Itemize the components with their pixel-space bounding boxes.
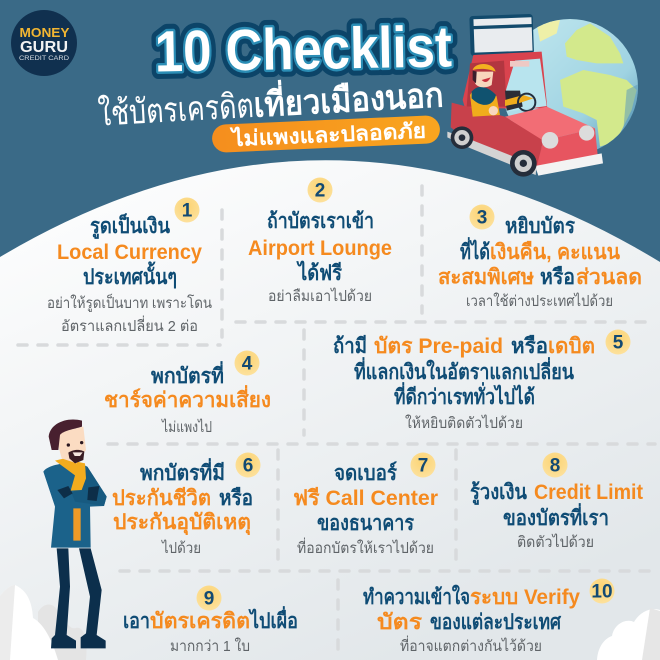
item 8: 8 [550,456,560,476]
item 7: ของธนาคาร [317,512,415,535]
subtitle: เที่ยวเมืองนอก [252,70,445,125]
item 6 [112,452,260,557]
item 1 [47,198,212,335]
item 1: รูดเป็นเงิน [90,212,171,240]
title: 10 Checklist: 10 Checklist [154,14,452,85]
logo: Money Guru Credit Card: GURU [20,39,68,56]
item 8: Credit Limit [534,481,643,504]
subtitle [97,70,445,134]
item 2 [248,178,392,305]
car and globe illustration [447,14,640,177]
item 7: จดเบอร์ [334,461,398,485]
item 1: อย่าให้รูดเป็นบาท เพราะโดน [47,293,212,312]
item 8 [470,452,643,551]
item 9: บัตรเครดิต [150,610,250,633]
hood [505,107,595,141]
head [55,427,86,463]
item 1: ประเทศนั้นๆ [83,261,177,289]
side body [451,103,543,167]
item 5 [333,330,630,432]
item 10: ที่อาจแตกต่างกันไว้ด้วย [400,635,542,655]
item 7 [293,452,438,557]
item 3 [438,204,642,310]
scarf [55,459,86,491]
item 4 [104,350,271,436]
item 10: ทำความเข้าใจ [363,584,470,609]
cab [463,52,547,108]
card on roof [469,14,534,56]
item 5: ถ้ามี [333,334,367,358]
item 3: หรือ [540,265,575,289]
subtitle pill: ไม่แพงและปลอดภัย [229,118,426,151]
item 2: อย่าลืมเอาไปด้วย [268,287,372,305]
item 9 [123,586,298,655]
item 7: ฟรี Call Center [293,486,438,510]
item 4: ไม่แพงไป [161,418,212,436]
item 1: 1 [182,200,193,222]
title: 10 Checklist: 10 Checklist [154,14,452,85]
bumper [535,153,603,176]
item 1: อัตราแลกเปลี่ยน 2 ต่อ [61,315,198,335]
item 2: ถ้าบัตรเราเข้า [267,209,374,233]
front [537,128,598,167]
wheels [451,126,473,149]
item 8: รู้วงเงิน [470,480,528,506]
item 2: 2 [315,180,325,202]
item 8: ของบัตรที่เรา [503,502,609,530]
item 4: ชาร์จค่าความเสี่ยง [104,384,271,412]
item 7: ที่ออกบัตรให้เราไปด้วย [297,537,434,557]
item 5: บัตร Pre-paid [374,335,503,358]
item 4: 4 [242,354,253,374]
item 3: เวลาใช้ต่างประเทศไปด้วย [466,292,613,310]
subtitle: ใช้บัตรเครดิต [97,86,255,134]
logo: Money Guru Credit Card: MONEY [20,26,70,40]
cloud bottom left [0,585,87,660]
item 2: ได้ฟรี [296,260,343,285]
item 6: 6 [243,456,253,476]
item 4: พกบัตรที่ [151,360,224,388]
item 6: ประกันชีวิต [112,486,211,510]
item 9: เอา [123,610,150,633]
item 5: หรือ [511,334,548,358]
item 7: 7 [418,456,428,476]
white content panel [0,160,660,660]
item 9: ไปเผื่อ [248,605,298,633]
item 10: บัตร [377,611,423,634]
dashboard [505,91,523,111]
item 6: ประกันอุบัติเหตุ [113,511,251,536]
item 10: ของแต่ละประเทศ [430,611,562,634]
item 3: ที่ได้ [460,236,490,264]
item 10 [363,578,614,655]
item 6: พกบัตรที่มี [140,457,225,485]
logo: Money Guru Credit Card [11,10,77,76]
item 10: ระบบ Verify [470,586,580,609]
logo: Money Guru Credit Card: CREDIT CARD [19,55,69,62]
item 3: 3 [477,208,487,228]
item 5: 5 [613,332,624,354]
subtitle pill [211,115,441,153]
item 8: ติดตัวไปด้วย [517,533,594,551]
window [506,59,547,112]
item 2: Airport Lounge [248,237,392,260]
cloud bottom right [597,608,660,660]
item 5: ที่แลกเงินในอัตราแลกเปลี่ยน [354,356,575,384]
item 1: Local Currency [57,241,202,264]
item 3: ส่วนลด [576,266,642,289]
item 5: เดบิต [548,335,595,358]
man [43,420,107,648]
item 5: ให้หยิบติดตัวไปด้วย [405,414,523,432]
item 6: หรือ [219,486,253,510]
driver [470,64,535,117]
item 9: 9 [204,588,214,610]
item 9: มากกว่า 1 ใบ [170,637,250,655]
item 10: 10 [591,582,613,602]
item 3: หยิบบัตร [505,215,576,238]
item 3: สะสมพิเศษ [438,266,534,289]
headlights [542,132,558,149]
item 3: เงินคืน, คะแนน [490,240,621,264]
legs [51,548,76,648]
item 5: ที่ดีกว่าเรททั่วไปได้ [394,381,535,409]
globe [502,19,640,157]
item 6: ไปด้วย [161,539,201,557]
dashed dividers [18,186,655,660]
coat [43,463,107,548]
